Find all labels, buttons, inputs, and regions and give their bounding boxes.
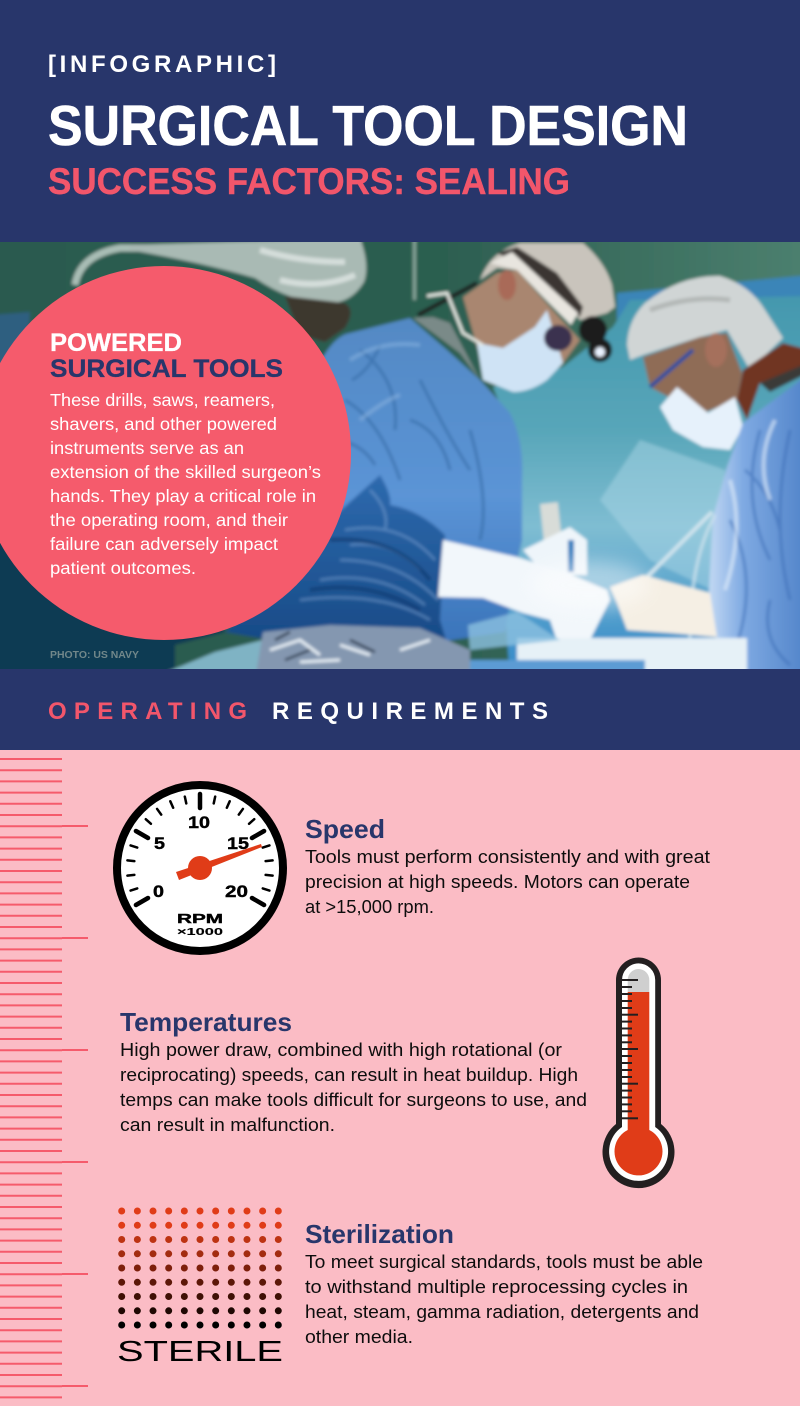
text: speed: Tools must perform consistently and with great <box>305 847 710 867</box>
text: temperatures <box>120 1007 587 1135</box>
callout body: failure can adversely impact <box>50 534 278 554</box>
callout body <box>50 390 321 578</box>
text: temperatures: Temperatures <box>120 1007 292 1037</box>
text: sterilization: heat, steam, gamma radiation, detergents and <box>305 1302 699 1322</box>
kicker: infographic: [INFOGRAPHIC] <box>48 51 276 78</box>
text: temperatures: can result in malfunction. <box>120 1115 335 1135</box>
icon: sterile dot matrix: STERILE <box>117 1336 283 1368</box>
icon: RPM gauge <box>117 785 283 951</box>
text: speed: at >15,000 rpm. <box>305 897 434 917</box>
ruler ticks along left edge <box>31 758 75 1399</box>
callout heading: POWERED <box>50 329 182 357</box>
text: speed <box>305 814 710 917</box>
text: temperatures: High power draw, combined with high rotational (or <box>120 1040 562 1060</box>
text: sterilization: other media. <box>305 1327 413 1347</box>
icon: RPM gauge: RPM <box>177 911 223 926</box>
callout: powered surgical tools <box>0 266 351 640</box>
text: sterilization: to withstand multiple reprocessing cycles in <box>305 1277 688 1297</box>
callout heading: SURGICAL TOOLS <box>50 355 283 383</box>
icon: RPM gauge: 15 <box>227 834 249 853</box>
icon: RPM gauge: 10 <box>188 813 210 832</box>
text: sterilization: To meet surgical standards, tools must be able <box>305 1252 703 1272</box>
callout body: extension of the skilled surgeon’s <box>50 462 321 482</box>
callout heading <box>50 329 283 383</box>
text: sterilization <box>305 1219 703 1347</box>
text: temperatures: reciprocating) speeds, can result in heat buildup. High <box>120 1065 578 1085</box>
title: SURGICAL TOOL DESIGN <box>48 94 688 158</box>
text: sterilization: Sterilization <box>305 1219 454 1249</box>
icon: RPM gauge: 0 <box>153 882 164 901</box>
callout body: These drills, saws, reamers, <box>50 390 275 410</box>
text: speed: precision at high speeds. Motors can operate <box>305 872 690 892</box>
subtitle: SUCCESS FACTORS: SEALING <box>48 161 570 202</box>
panel: header <box>0 0 800 242</box>
photo: surgeons operating <box>0 225 800 685</box>
callout body: hands. They play a critical role in <box>50 486 316 506</box>
icon: RPM gauge: 20 <box>225 882 248 901</box>
panel: operating requirements heading: OPERATING <box>48 698 247 725</box>
panel: operating requirements heading: REQUIREMENTS <box>272 698 548 725</box>
icon: thermometer <box>602 958 674 1188</box>
photo credit: PHOTO: US NAVY <box>50 650 139 661</box>
panel: operating requirements heading <box>0 669 800 750</box>
callout body: instruments serve as an <box>50 438 244 458</box>
text: speed: Speed <box>305 814 385 844</box>
callout body: patient outcomes. <box>50 558 196 578</box>
icon: RPM gauge: 5 <box>154 834 165 853</box>
text: temperatures: temps can make tools difficult for surgeons to use, and <box>120 1090 587 1110</box>
callout body: the operating room, and their <box>50 510 288 530</box>
icon: RPM gauge: ×1000 <box>177 927 224 938</box>
callout body: shavers, and other powered <box>50 414 277 434</box>
